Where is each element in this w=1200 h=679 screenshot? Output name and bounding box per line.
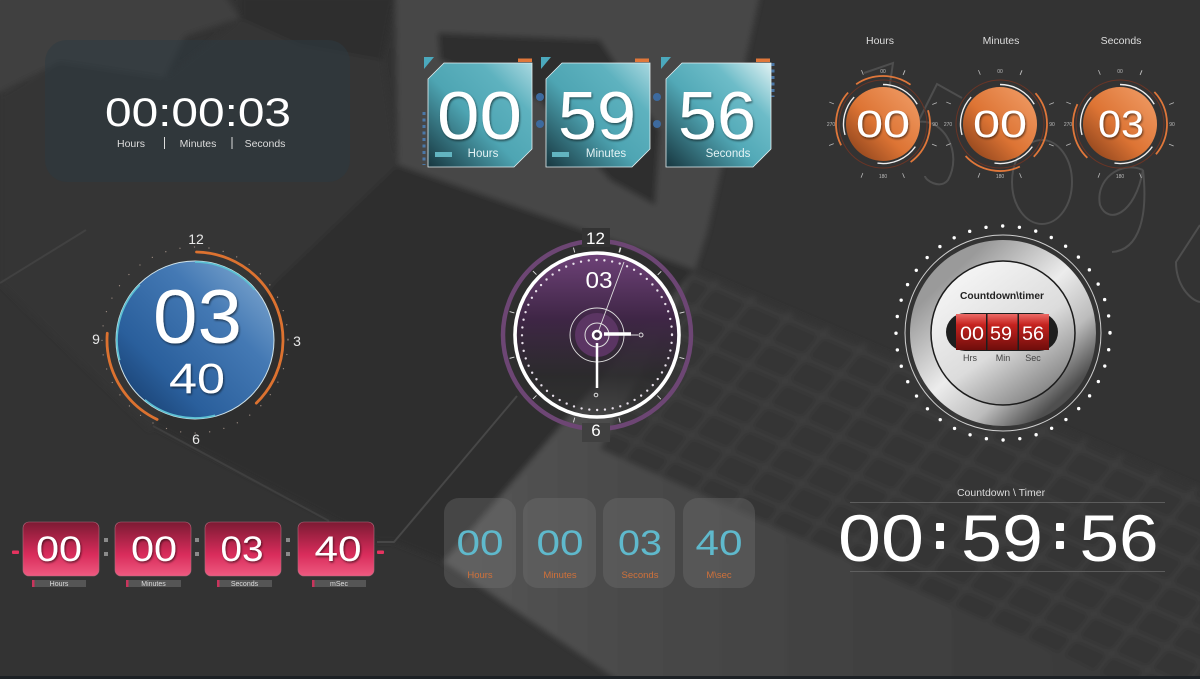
- panel: large line-framed timer: 00: [838, 501, 924, 575]
- panel: silver capsule timer: [896, 226, 1110, 440]
- card: hours: [23, 522, 99, 588]
- panel: translucent cyan timer: Hours: [467, 570, 493, 581]
- card: hours: Hours: [468, 148, 499, 160]
- card: hours: 00: [437, 78, 522, 154]
- dial: seconds: 180: [1116, 174, 1124, 180]
- panel: orange dial timers: [811, 35, 1192, 196]
- dial: seconds: 03: [1098, 104, 1144, 146]
- dial: minutes: 270: [944, 122, 952, 128]
- panel: large line-framed timer: 59: [961, 501, 1043, 575]
- dial: seconds: 90: [1169, 122, 1175, 128]
- card: seconds: 56: [678, 78, 756, 154]
- panel: purple analog clock: [489, 227, 705, 443]
- panel: large line-framed timer: Countdown \ Timer: [957, 487, 1046, 499]
- card: seconds: 03: [220, 530, 264, 569]
- panel: silver capsule timer: 00: [960, 324, 984, 345]
- panel: orange dial timers: Seconds: [1101, 35, 1141, 47]
- panel: silver capsule timer: Min: [996, 353, 1010, 363]
- dial: hours: 00: [856, 104, 910, 146]
- card: hours: 00: [36, 530, 82, 569]
- panel: silver capsule timer: 56: [1022, 324, 1044, 345]
- panel: pink cards timer: [12, 522, 384, 588]
- panel: translucent cyan timer: 00: [456, 524, 504, 563]
- card: seconds: [205, 522, 281, 588]
- panel: large line-framed timer: [838, 487, 1165, 575]
- card: milliseconds: mSec: [330, 581, 348, 588]
- panel: digital time readout: Seconds: [245, 138, 285, 150]
- dial: hours: [811, 52, 955, 196]
- panel: teal cards timer: [424, 57, 773, 167]
- card: milliseconds: [298, 522, 374, 588]
- panel: silver capsule timer: Sec: [1025, 353, 1041, 363]
- panel: blue clock timer: 03: [153, 275, 242, 360]
- dial: minutes: 00: [997, 69, 1003, 75]
- panel: silver capsule timer: Hrs: [963, 353, 977, 363]
- panel: digital time readout: Minutes: [180, 138, 216, 150]
- handwriting strokes are background decoration: [0, 63, 1200, 542]
- panel: silver capsule timer: 59: [990, 324, 1012, 345]
- card: minutes: Minutes: [141, 581, 166, 588]
- card: minutes: 59: [558, 78, 636, 154]
- dial: seconds: [1048, 52, 1192, 196]
- dial: hours: 270: [827, 122, 835, 128]
- panel: translucent cyan timer: 03: [618, 524, 662, 563]
- panel: silver capsule timer: Countdown\timer: [960, 291, 1044, 302]
- panel: digital time readout: 00:00:03: [105, 91, 291, 135]
- panel: translucent cyan timer: 40: [696, 524, 742, 563]
- panel: blue clock timer: 9: [92, 331, 100, 347]
- card: hours: [428, 63, 532, 167]
- card: seconds: Seconds: [706, 148, 751, 160]
- panel: translucent cyan timer: Seconds: [622, 570, 659, 581]
- panel: orange dial timers: Hours: [866, 35, 894, 47]
- dial: minutes: 00: [973, 104, 1027, 146]
- panel: blue clock timer: [78, 223, 312, 457]
- panel: purple analog clock: 03: [586, 267, 612, 293]
- card: milliseconds: 40: [314, 530, 362, 569]
- dial: hours: 00: [880, 69, 886, 75]
- panel: purple analog clock: 12: [586, 229, 605, 248]
- card: minutes: [546, 63, 650, 167]
- card: seconds: [666, 63, 771, 167]
- panel: translucent cyan timer: 00: [536, 524, 584, 563]
- panel: blue clock timer: 6: [192, 431, 200, 447]
- panel: orange dial timers: Minutes: [983, 35, 1019, 47]
- panel: large line-framed timer: 56: [1080, 501, 1158, 575]
- panel: digital time readout: [45, 40, 350, 182]
- dial: seconds: 270: [1064, 122, 1072, 128]
- dial: minutes: 90: [1049, 122, 1055, 128]
- panel: blue clock timer: 40: [169, 355, 225, 403]
- dial: minutes: [928, 52, 1072, 196]
- dial: seconds: 00: [1117, 69, 1123, 75]
- panel: translucent cyan timer: Minutes: [543, 570, 577, 581]
- card: minutes: [115, 522, 191, 588]
- panel: translucent cyan timer: M\sec: [706, 570, 732, 581]
- card: seconds: Seconds: [231, 581, 259, 588]
- panel: translucent cyan timer: [444, 498, 755, 588]
- panel: digital time readout: Hours: [117, 138, 145, 150]
- card: minutes: Minutes: [586, 148, 626, 160]
- dial: hours: 90: [932, 122, 938, 128]
- card: hours: Hours: [50, 581, 69, 588]
- panel: blue clock timer: 12: [188, 231, 204, 247]
- dial: hours: 180: [879, 174, 887, 180]
- card: minutes: 00: [131, 530, 177, 569]
- panel: blue clock timer: 3: [293, 333, 301, 349]
- panel: purple analog clock: 6: [591, 421, 601, 440]
- dial: minutes: 180: [996, 174, 1004, 180]
